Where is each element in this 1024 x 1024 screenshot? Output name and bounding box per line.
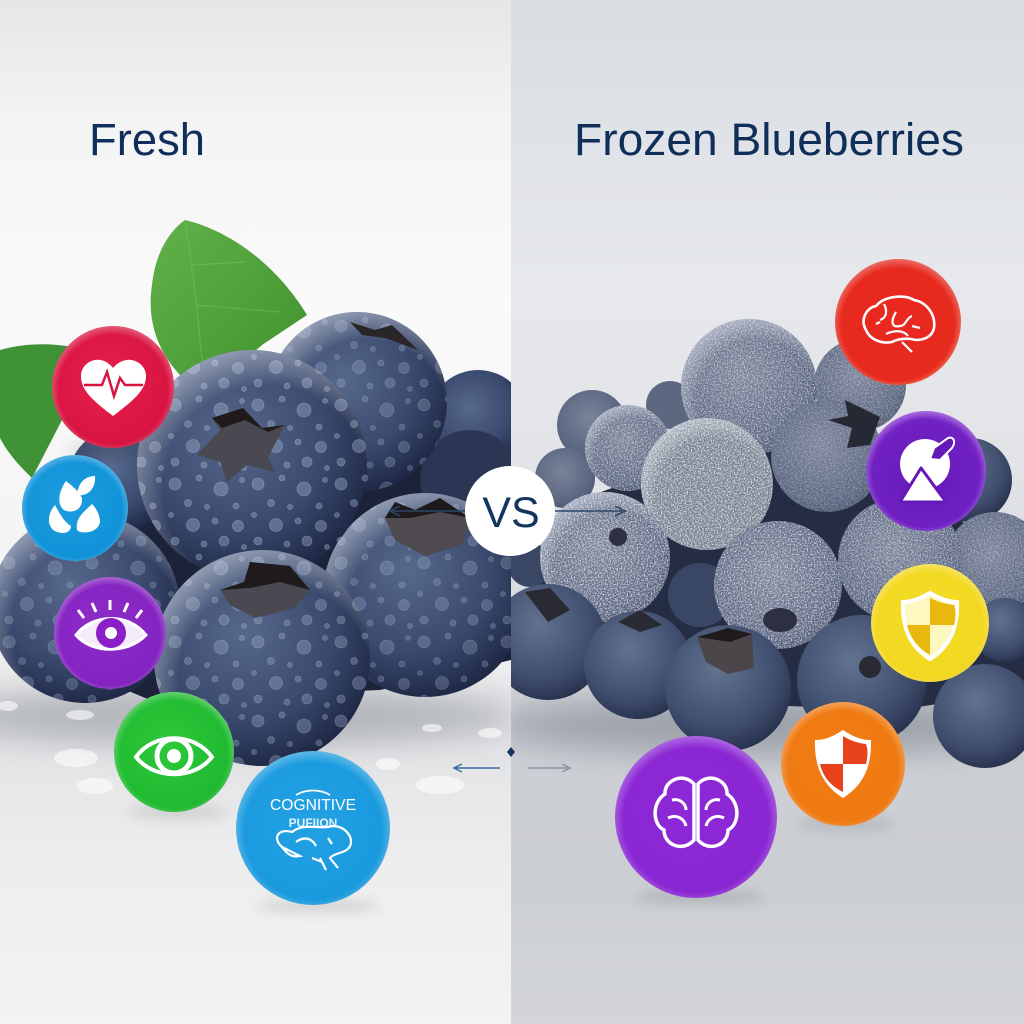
dark gaps behind frozen berries — [530, 440, 1024, 710]
arrow: vs pointing left — [390, 506, 470, 516]
frozen berry pile — [490, 319, 1024, 768]
frosted berry centre — [641, 418, 773, 550]
small diamond marker — [507, 747, 515, 757]
dark berry lower left — [584, 610, 692, 719]
panel: fresh background — [0, 0, 511, 1024]
badge: antioxidant drops — [22, 455, 128, 561]
arrow: lower left — [454, 764, 500, 772]
frosted berry right — [838, 498, 962, 622]
badge: heart health — [52, 326, 174, 454]
badge label: function: PUFIION — [289, 816, 337, 830]
heading: Frozen Blueberries: Frozen Blueberries — [574, 114, 964, 165]
dark berry far right — [933, 664, 1024, 768]
water droplets on table — [0, 701, 502, 794]
frosted berry upper left — [585, 405, 671, 491]
frosted berry middle — [714, 521, 842, 649]
heading: Fresh: Fresh — [89, 114, 205, 165]
arrow: vs pointing right — [552, 506, 625, 516]
badge: cognitive function — [236, 751, 390, 912]
shadow under frozen pile — [490, 695, 1024, 755]
vs badge: VS — [482, 489, 540, 537]
badge: purple brain — [615, 736, 777, 903]
brain outline — [277, 826, 351, 870]
badge: red brain — [835, 259, 961, 385]
shadow under fresh pile — [0, 685, 520, 745]
badge label: cognitive: COGNITIVE — [270, 797, 356, 814]
berry left — [0, 513, 180, 703]
badge: green eye — [114, 692, 234, 818]
berry right — [323, 493, 527, 697]
dark berry far left — [511, 584, 603, 700]
badge: orange shield — [781, 702, 905, 830]
green leaf top — [150, 220, 307, 375]
badge: purple vision — [866, 411, 986, 531]
badge: yellow shield — [871, 564, 989, 682]
berry main top — [137, 350, 367, 580]
vs badge — [465, 466, 555, 556]
badge: eye with lashes — [54, 577, 166, 689]
arrow: lower right — [528, 764, 570, 772]
back berries — [68, 312, 528, 532]
panel: frozen background — [511, 0, 1024, 1024]
fresh berry pile — [0, 220, 528, 794]
dark gaps behind fresh berries — [130, 462, 511, 699]
back frozen berries — [508, 339, 1024, 662]
frosted berry left — [540, 492, 670, 622]
dark berry lower right — [797, 615, 927, 745]
green leaf left — [0, 344, 72, 478]
frosted berry top — [681, 319, 817, 455]
berry bottom — [154, 550, 370, 766]
dark berry front — [665, 625, 791, 751]
dark berry upper right — [771, 400, 883, 512]
